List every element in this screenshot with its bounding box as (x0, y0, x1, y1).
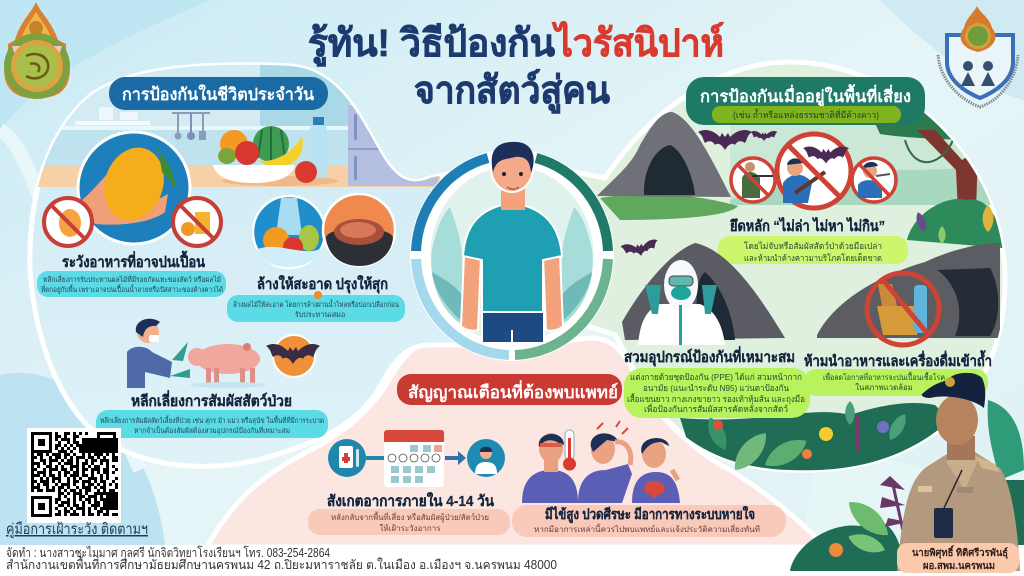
heading pill: risk area: (เช่น ถ้ำหรือแหล่งธรรมชาติที่มีค้างคาว) (733, 108, 879, 120)
footer band (0, 545, 1024, 576)
heading pill: risk area: การป้องกันเมื่ออยู่ในพื้นที่เสี่ยง (700, 84, 911, 108)
block: wash and cook (227, 275, 405, 322)
forest scene (600, 109, 1003, 480)
icon: no eating (852, 158, 896, 202)
plants lower right (790, 400, 1024, 571)
heading pill: risk area (686, 77, 925, 125)
title: จากสัตว์สู่คน (414, 69, 610, 114)
block: wear PPE: แต่งกายด้วยชุดป้องกัน (PPE) ได้แก่ สวมหน้ากาก (630, 372, 802, 383)
icon: PPE person and cave (622, 243, 785, 345)
block: no food: เพื่อลดโอกาสที่อาหารจะปนเปื้อนเชื้อโรค (823, 371, 945, 382)
block: avoid sick animals: หลีกเลี่ยงการสัมผัสสัตว์เลี้ยงที่ป่วย เช่น สุกร ม้า แมว หรือสุนัข ในพื้นที่ที่มีการระบาด (100, 415, 324, 425)
footer credits (6, 545, 557, 572)
panel: risk area prevention (572, 60, 1008, 473)
block: wash and cook: รับประทานเสมอ (295, 310, 345, 319)
title: ไวรัสนิปาห์ (551, 21, 724, 65)
block: no food: ในสภาพแวดล้อม (855, 383, 913, 392)
block: observe symptoms: ให้เฝ้าระวังอาการ (379, 524, 441, 533)
arrow: clipboard to calendar (366, 456, 386, 460)
block: no hunt rule: และห้ามนำค้างคาวมาบริโภคโดยเด็ดขาด (744, 252, 882, 263)
block: wear PPE: อนามัย (แนะนำระดับ N95) แว่นตาป้องกัน (643, 383, 789, 393)
heading pill: warning (397, 374, 622, 405)
kitchen scene (20, 60, 440, 187)
block: symptoms (512, 505, 786, 537)
central figure with ring (410, 142, 614, 361)
water bottle (310, 117, 327, 178)
ring segments (416, 158, 608, 355)
heading pill: warning: สัญญาณเตือนที่ต้องพบแพทย์ (408, 380, 618, 403)
icon: doctor (467, 439, 505, 477)
logo: shield emblem (938, 6, 1018, 107)
block: wear PPE (624, 346, 810, 418)
block: no food: ห้ามนำอาหารและเครื่องดื่มเข้าถ้ำ (804, 350, 992, 370)
heading pill: daily prevention (109, 77, 328, 110)
panel: warning signs (207, 338, 825, 547)
icon: no bitten fruit (44, 198, 92, 246)
icon: clipboard (328, 439, 366, 477)
icon: no juice (173, 198, 221, 246)
QR code (27, 428, 121, 523)
plants behind figure (431, 207, 593, 325)
panel: daily life prevention (27, 62, 462, 469)
block: avoid sick animals: หลีกเลี่ยงการสัมผัสสัตว์ป่วย (131, 390, 292, 410)
block: symptoms: มีไข้สูง ปวดศีรษะ มีอาการทางระบบหายใจ (545, 505, 755, 523)
block: observe symptoms: สังเกตอาการภายใน 4-14 วัน (327, 492, 495, 510)
block: no hunt rule: โดยไม่จับหรือสัมผัสสัตว์ป่าด้วยมือเปล่า (744, 241, 882, 251)
block: wear PPE: เสื้อแขนยาว กางเกงขายาว รองเท้าหุ้มส้น และถุงมือ (627, 393, 805, 405)
block: symptoms: หากมีอาการเหล่านี้ควรไปพบแพทย์และแจ้งประวัติความเสี่ยงทันที (534, 523, 760, 534)
title: รู้ทัน! วิธีป้องกัน (308, 23, 555, 67)
jungle plants (703, 401, 910, 476)
icon: hand holding mango (78, 132, 190, 244)
block: wash and cook: ล้างผลไม้ให้สะอาด โดยการล้างผ่านน้ำไหลหรือปอกเปลือกก่อน (233, 299, 399, 309)
name tag (897, 543, 1019, 573)
block: food caution (37, 250, 226, 297)
icon: thermometer (563, 430, 576, 470)
block: observe symptoms (308, 492, 510, 535)
title (308, 21, 724, 114)
block: food caution: หลีกเลี่ยงการรับประทานผลไม้ที่มีรอยกัดแทะของสัตว์ หรือผลไม้ (43, 275, 221, 284)
block: food caution: ที่ตกอยู่กับพื้น เพราะอาจปนเปื้อนน้ำลายหรือปัสสาวะของค้างคาวได้ (41, 284, 223, 294)
arrow: calendar to doctor (445, 451, 466, 465)
icon: grilling meat (323, 194, 395, 266)
photo: director (897, 373, 1020, 571)
icon: no hunting (731, 158, 775, 202)
icon: symptoms people (522, 421, 680, 503)
block: avoid sick animals (96, 390, 328, 438)
block: no hunt rule (718, 216, 908, 264)
fruit bowl (213, 117, 338, 186)
icon: washing fruit (253, 196, 325, 268)
icon: cave (597, 112, 731, 197)
heading pill: daily prevention: การป้องกันในชีวิตประจำวัน (122, 84, 314, 104)
name tag: ผอ.สพม.นครพนม (923, 561, 995, 572)
footer credits: จัดทำ : นางสาวชะไมมาศ กุลศรี นักจิตวิทยาโรงเรียนฯ โทร. 083-254-2864 (6, 545, 330, 561)
block: wash and cook: ล้างให้สะอาด ปรุงให้สุก (257, 275, 388, 294)
bats (620, 101, 778, 259)
block: no food (804, 350, 992, 396)
icon: calendar (384, 430, 444, 487)
figure: man (461, 142, 563, 343)
name tag: นายพิศุทธิ์ ทิติศรีวรพันธุ์ (912, 545, 1008, 559)
icon: bat in orange circle (266, 335, 320, 377)
block: wear PPE: สวมอุปกรณ์ป้องกันที่เหมาะสม (624, 346, 795, 367)
logo: OBEC emblem (4, 2, 70, 99)
footer credits: สำนักงานเขตพื้นที่การศึกษามัธยมศึกษานครพนม 42 ถ.ปิยะมหาราชลัย ต.ในเมือง อ.เมืองฯ จ.นครพนม 48000 (6, 555, 557, 572)
icon: no hunting bats (777, 134, 851, 208)
block: no hunt rule: ยึดหลัก “ไม่ล่า ไม่หา ไม่กิน” (730, 216, 885, 235)
block: food caution: ระวังอาหารที่อาจปนเปื้อน (62, 250, 206, 271)
block: wear PPE: เพื่อป้องกันการสัมผัสสารคัดหลั่งจากสัตว์ (644, 403, 788, 414)
block: observe symptoms: หลังกลับจากพื้นที่เสี่ยง หรือสัมผัสผู้ป่วย/สัตว์ป่วย (331, 511, 489, 523)
icon: no food in cave (867, 268, 998, 345)
QR caption: คู่มือการเฝ้าระวัง ติดตามฯ (6, 521, 148, 538)
block: avoid sick animals: หากจำเป็นต้องสัมผัสต้องสวมอุปกรณ์ป้องกันที่เหมาะสม (134, 425, 290, 435)
icon: vet with pig (127, 319, 266, 388)
